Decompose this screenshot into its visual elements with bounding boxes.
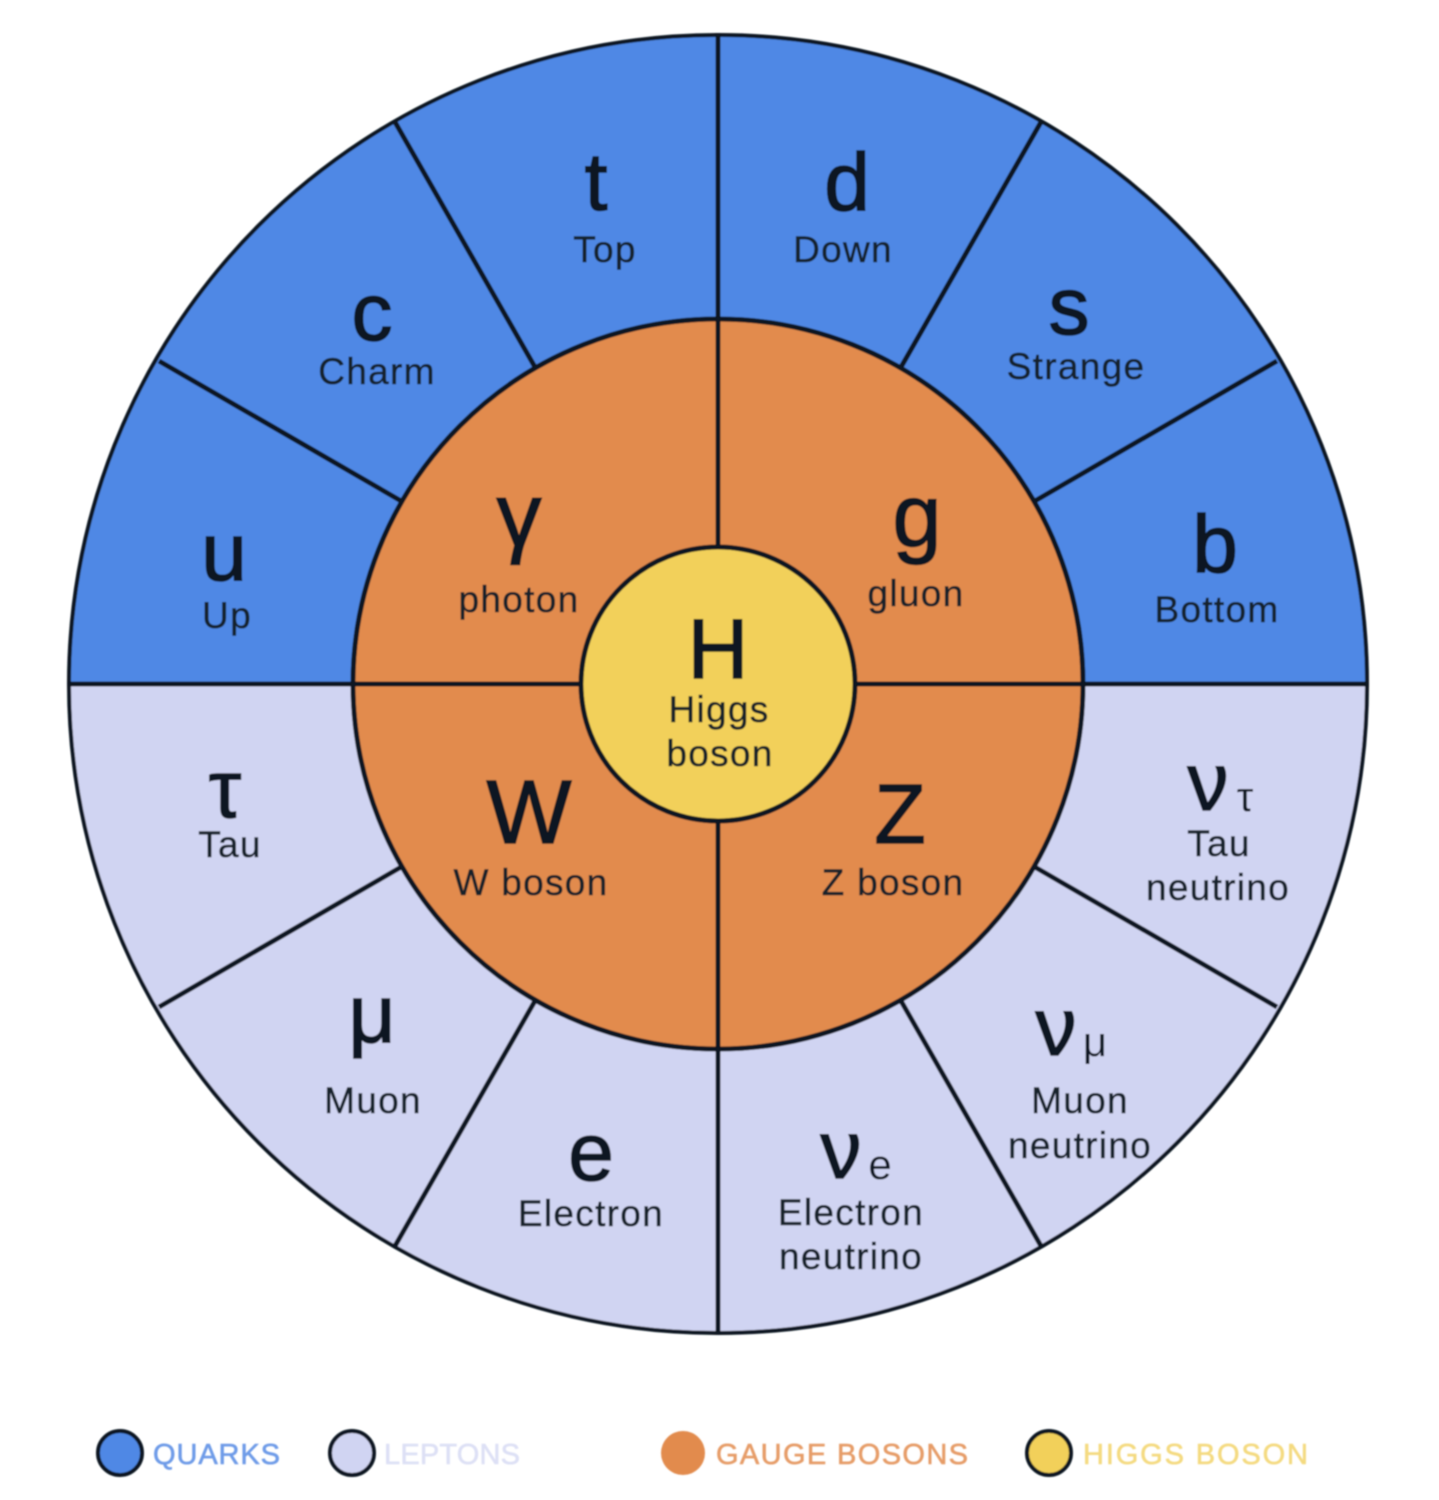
lepton: muon <box>324 969 422 1121</box>
quark: bottom: Bottom <box>1154 589 1280 630</box>
quark: charm: c <box>352 267 392 358</box>
gauge boson: W <box>453 763 609 903</box>
quark: top: Top <box>573 229 637 270</box>
lepton: tau <box>198 744 262 865</box>
legend <box>98 1431 1308 1475</box>
Higgs boson label: H <box>688 602 748 696</box>
gauge boson: W: W boson <box>453 862 609 903</box>
lepton: muon: μ <box>348 969 396 1060</box>
Higgs core <box>581 547 855 821</box>
lepton: tau: Tau <box>198 824 262 865</box>
gauge boson: photon: γ <box>496 466 542 566</box>
gauge boson dividers <box>353 319 1083 1049</box>
legend: quarks: QUARKS <box>153 1439 280 1471</box>
lepton: electron neutrino <box>778 1105 924 1277</box>
lepton: electron neutrino: e <box>868 1141 892 1188</box>
gauge boson: gluon: gluon <box>867 573 965 614</box>
quark: up: Up <box>202 595 252 636</box>
gauge boson: photon <box>459 466 579 620</box>
lepton: tau neutrino: τ <box>1237 773 1254 820</box>
Higgs boson label: boson <box>666 733 774 774</box>
lepton: electron neutrino: ν <box>820 1105 862 1196</box>
outer ring: quarks half <box>69 35 1367 684</box>
lepton: tau: τ <box>209 744 241 835</box>
legend: Higgs boson: HIGGS BOSON <box>1083 1439 1308 1471</box>
quark: bottom <box>1154 499 1280 630</box>
lepton: muon neutrino <box>1008 982 1152 1166</box>
gauge boson: gluon <box>867 466 965 614</box>
quark: charm: Charm <box>318 351 436 392</box>
lepton: electron: Electron <box>518 1193 664 1234</box>
outer circle outline <box>69 35 1367 1333</box>
quark: down <box>793 137 893 270</box>
quark: top: t <box>585 137 608 228</box>
lepton: electron <box>518 1107 664 1234</box>
gauge boson: Z: Z <box>874 767 926 861</box>
legend: leptons <box>330 1431 520 1475</box>
lepton: tau neutrino: Tau <box>1187 823 1251 864</box>
lepton: muon neutrino: μ <box>1083 1018 1107 1065</box>
quark: strange: s <box>1048 261 1090 352</box>
quark: up <box>201 507 252 636</box>
legend: quarks <box>98 1431 280 1475</box>
Higgs boson label <box>666 602 774 774</box>
lepton: tau neutrino: neutrino <box>1146 867 1290 908</box>
lepton: tau neutrino <box>1146 737 1290 908</box>
legend: gauge bosons: GAUGE BOSONS <box>716 1439 968 1471</box>
quark: strange <box>1007 261 1145 387</box>
quark: strange: Strange <box>1007 346 1145 387</box>
gauge boson: W: W <box>487 763 572 863</box>
gauge boson: gluon: g <box>893 466 941 565</box>
quark: up: u <box>201 507 247 598</box>
quark: down: Down <box>793 229 893 270</box>
gauge boson: Z: Z boson <box>822 862 964 903</box>
lepton: muon neutrino: ν <box>1036 982 1076 1073</box>
outer ring spokes <box>68 33 1368 1332</box>
quark: charm <box>318 267 436 392</box>
gauge bosons ring <box>353 319 1083 1049</box>
legend: Higgs boson <box>1027 1431 1308 1475</box>
quark: bottom: b <box>1192 499 1238 590</box>
lepton: electron: e <box>568 1107 614 1198</box>
lepton: electron neutrino: Electron <box>778 1192 924 1233</box>
Higgs boson label: Higgs <box>668 689 770 730</box>
quark: down: d <box>824 137 870 228</box>
lepton: muon: Muon <box>324 1080 422 1121</box>
legend: gauge bosons <box>661 1431 968 1475</box>
gauge boson: Z <box>822 767 964 903</box>
gauge boson: photon: photon <box>459 579 579 620</box>
outer ring: leptons half <box>69 684 1367 1333</box>
quark: top <box>573 137 637 270</box>
lepton: muon neutrino: neutrino <box>1008 1125 1152 1166</box>
lepton: electron neutrino: neutrino <box>779 1236 923 1277</box>
lepton: muon neutrino: Muon <box>1031 1080 1129 1121</box>
panel: particle wheel <box>68 33 1368 1333</box>
legend: leptons: LEPTONS <box>384 1439 520 1471</box>
lepton: tau neutrino: ν <box>1188 737 1228 828</box>
